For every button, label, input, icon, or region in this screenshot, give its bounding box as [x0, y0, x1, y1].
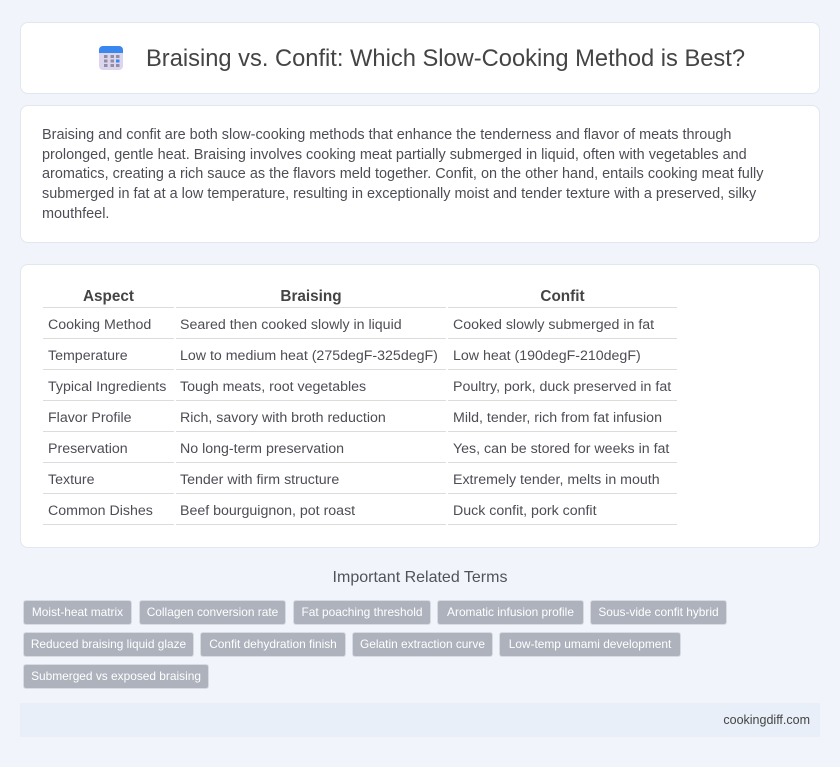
table panel [20, 264, 820, 548]
related term tags: Reduced braising liquid glaze [31, 637, 186, 651]
intro paragraph: Braising and confit are both slow-cooking methods that enhance the tenderness and flavor of meats through [42, 127, 731, 143]
related terms heading: Important Related Terms [333, 569, 507, 586]
intro paragraph: aromatics, creating a rich sauce as the flavors meld together. Confit, on the other hand, entails cooking meat fully [42, 166, 763, 182]
comparison table: Yes, can be stored for weeks in fat [453, 441, 669, 457]
comparison table: Common Dishes [48, 503, 153, 519]
related term tags [23, 600, 727, 689]
footer bar [20, 703, 820, 737]
intro paragraph [42, 127, 764, 222]
comparison table: Tender with firm structure [180, 472, 339, 488]
related term tags: Fat poaching threshold [302, 605, 422, 619]
comparison table: Poultry, pork, duck preserved in fat [453, 379, 671, 395]
comparison table [43, 288, 677, 525]
comparison table: Seared then cooked slowly in liquid [180, 317, 402, 333]
comparison table: Braising [280, 288, 342, 305]
intro paragraph: submerged in fat at a low temperature, resulting in exceptionally moist and tender texture with a preserved, silky [42, 186, 756, 202]
comparison table: Low to medium heat (275degF-325degF) [180, 348, 438, 364]
comparison table: Rich, savory with broth reduction [180, 410, 386, 426]
intro paragraph: mouthfeel. [42, 206, 109, 222]
footer source text: cookingdiff.com [723, 713, 810, 727]
related term tags: Moist-heat matrix [32, 605, 123, 619]
comparison table: Beef bourguignon, pot roast [180, 503, 355, 519]
comparison table: Cooking Method [48, 317, 151, 333]
table header [83, 288, 585, 305]
comparison table: Aspect [83, 288, 134, 305]
comparison table: Preservation [48, 441, 128, 457]
comparison table: Low heat (190degF-210degF) [453, 348, 641, 364]
related term tags: Gelatin extraction curve [360, 637, 485, 651]
comparison table: Mild, tender, rich from fat infusion [453, 410, 662, 426]
related term tags: Aromatic infusion profile [447, 605, 574, 619]
related term tags: Sous-vide confit hybrid [598, 605, 719, 619]
icon: calendar [99, 46, 123, 70]
intro paragraph: prolonged, gentle heat. Braising involves cooking meat partially submerged in liquid, often with vegetables and [42, 147, 747, 163]
related term tags: Collagen conversion rate [147, 605, 278, 619]
comparison table: Texture [48, 472, 95, 488]
comparison table: Temperature [48, 348, 128, 364]
related term tags: Confit dehydration finish [209, 637, 337, 651]
title: Braising vs. Confit: Which Slow-Cooking Method is Best? [146, 46, 745, 72]
comparison table: Duck confit, pork confit [453, 503, 597, 519]
related term tags: Low-temp umami development [509, 637, 671, 651]
comparison table: Typical Ingredients [48, 379, 166, 395]
comparison table: Extremely tender, melts in mouth [453, 472, 660, 488]
comparison table: No long-term preservation [180, 441, 344, 457]
comparison table: Cooked slowly submerged in fat [453, 317, 654, 333]
comparison table: Tough meats, root vegetables [180, 379, 366, 395]
intro text panel [20, 105, 820, 243]
header panel [20, 22, 820, 94]
comparison table: Confit [540, 288, 585, 305]
related term tags: Submerged vs exposed braising [31, 669, 201, 683]
comparison table: Flavor Profile [48, 410, 132, 426]
